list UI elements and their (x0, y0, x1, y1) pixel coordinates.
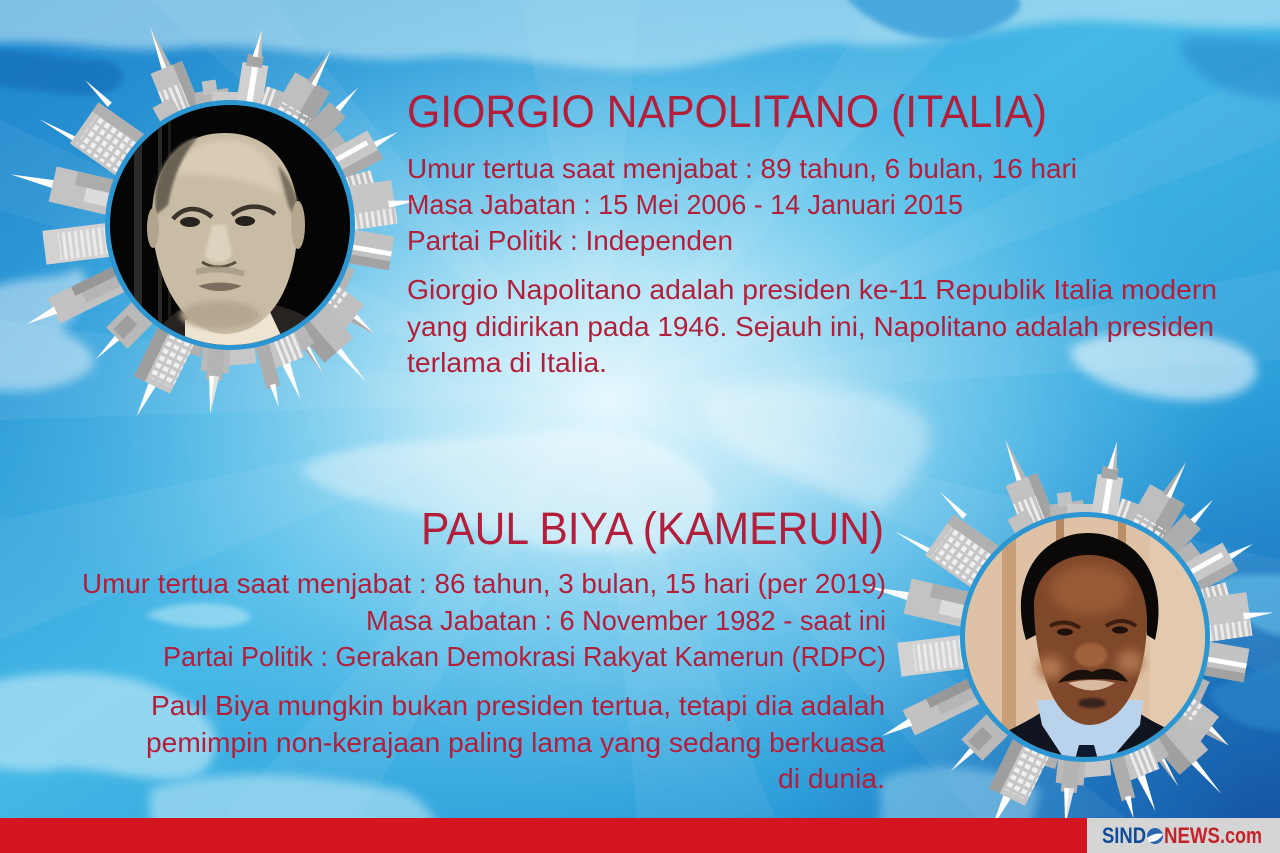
facts: Napolitano: Masa Jabatan : 15 Mei 2006 - 14 Januari 2015 (407, 189, 963, 220)
portrait: Paul Biya (960, 512, 1210, 770)
title: Paul Biya: PAUL BIYA (KAMERUN) (421, 503, 884, 554)
description: Napolitano: terlama di Italia. (407, 347, 607, 378)
facts: Biya: Umur tertua saat menjabat : 86 tahun, 3 bulan, 15 hari (per 2019) (82, 568, 886, 599)
logo: SINDOnews.com: .com (1220, 823, 1262, 848)
title: Giorgio Napolitano: GIORGIO NAPOLITANO (ITALIA) (407, 86, 1047, 137)
description: Napolitano (407, 274, 1217, 378)
facts: Biya (82, 568, 886, 672)
facts: Napolitano (407, 153, 1077, 256)
description: Biya: pemimpin non-kerajaan paling lama yang sedang berkuasa (146, 727, 885, 758)
logo: SINDOnews.com (1102, 823, 1262, 848)
facts: Napolitano: Umur tertua saat menjabat : 89 tahun, 6 bulan, 16 hari (407, 153, 1077, 184)
logo: SINDOnews.com: SIND (1102, 823, 1146, 848)
footer bar (0, 818, 1280, 853)
description: Biya: di dunia. (778, 763, 885, 794)
facts: Biya: Partai Politik : Gerakan Demokrasi Rakyat Kamerun (RDPC) (163, 641, 886, 672)
logo globe (1147, 828, 1163, 844)
description: Biya (146, 690, 885, 794)
logo: SINDOnews.com: NEWS (1164, 823, 1220, 848)
description: Napolitano: Giorgio Napolitano adalah presiden ke-11 Republik Italia modern (407, 274, 1217, 305)
description: Napolitano: yang didirikan pada 1946. Sejauh ini, Napolitano adalah presiden (407, 311, 1214, 342)
city ring: Biya (862, 433, 1276, 837)
description: Biya: Paul Biya mungkin bukan presiden tertua, tetapi dia adalah (151, 690, 885, 721)
portrait: Giorgio Napolitano (105, 100, 355, 350)
facts: Biya: Masa Jabatan : 6 November 1982 - saat ini (366, 605, 886, 636)
city ring: Napolitano (7, 21, 421, 425)
facts: Napolitano: Partai Politik : Independen (407, 225, 733, 256)
